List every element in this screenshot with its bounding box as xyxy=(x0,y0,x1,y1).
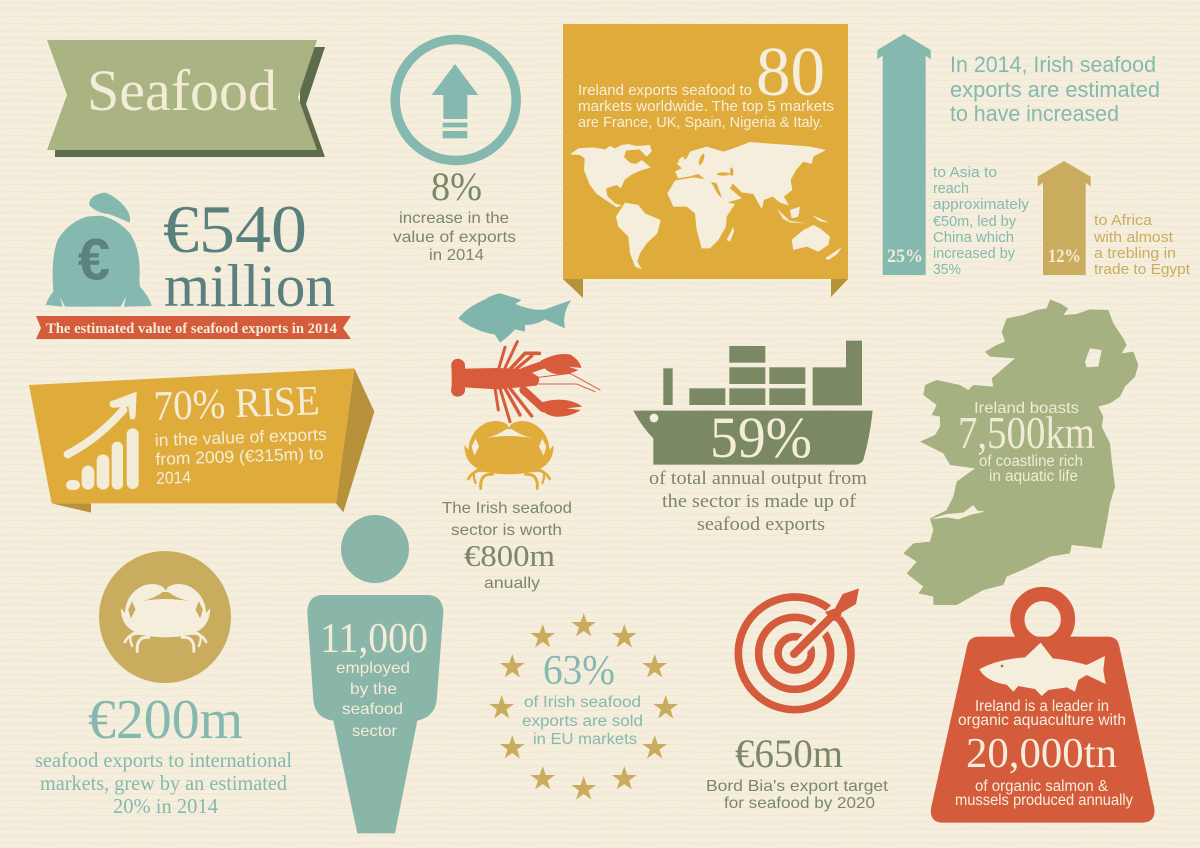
stat: 8% increase xyxy=(393,164,516,264)
icon: lobster xyxy=(451,342,600,422)
icon: rising teal arrow xyxy=(877,34,931,275)
headline: 540 million xyxy=(163,191,335,319)
text: total annual output: of total annual output from xyxy=(649,468,867,489)
Ireland text: in aquatic life xyxy=(989,468,1078,485)
panel: export markets xyxy=(563,24,848,298)
icon: target with dart xyxy=(738,588,859,710)
ribbon text xyxy=(153,378,328,488)
text: total annual output xyxy=(649,468,867,535)
title banner xyxy=(47,40,325,157)
icon: rising gold arrow xyxy=(1038,161,1091,275)
icon: money bag: € xyxy=(78,227,110,292)
Ireland text: Ireland boasts xyxy=(974,400,1079,417)
text: Asia: to Asia to xyxy=(933,165,997,181)
icon: rising bar chart with arrow xyxy=(66,392,139,490)
figure: person xyxy=(307,515,443,833)
stat: 200m: €200m xyxy=(88,689,243,751)
weight text: mussels produced annually xyxy=(955,792,1133,809)
text: Asia: 35% xyxy=(933,262,961,278)
person text: by the xyxy=(350,681,397,698)
arrow percentages: 12% xyxy=(1048,246,1081,267)
markets text: Ireland exports seafood to xyxy=(578,83,752,99)
person text xyxy=(320,616,428,740)
text: export target: €650m xyxy=(735,731,843,776)
text: Africa: trade to Egypt xyxy=(1094,262,1190,278)
stat: 63%: exports are sold xyxy=(522,713,643,730)
text: sector worth: The Irish seafood xyxy=(442,500,572,517)
stat: 8% increase: value of exports xyxy=(393,229,516,246)
weight text xyxy=(955,698,1133,809)
stat: 63% xyxy=(522,648,643,748)
person text: employed xyxy=(336,660,410,677)
headline: 540 million: €540 xyxy=(163,191,307,267)
icon: ring of EU stars xyxy=(489,613,678,800)
text: Asia xyxy=(933,165,1030,278)
text: sector worth xyxy=(442,500,572,592)
ribbon text: 70% RISE xyxy=(153,378,320,430)
stat: 8% increase: in 2014 xyxy=(429,247,484,264)
text: Africa: to Africa xyxy=(1094,213,1153,229)
text: Africa: with almost xyxy=(1093,230,1173,246)
panel: 70% rise ribbon xyxy=(29,368,374,513)
weight text: 20,000tn xyxy=(966,731,1117,777)
stat: 200m xyxy=(35,689,292,818)
ribbon text: 2014 xyxy=(156,468,191,488)
stat: 63%: in EU markets xyxy=(533,731,637,748)
text: Asia: increased by xyxy=(933,246,1016,262)
icon: circled up arrow xyxy=(395,40,516,160)
text: export target: for seafood by 2020 xyxy=(724,795,875,812)
text: Asia: approximately xyxy=(933,197,1030,213)
icon: container ship xyxy=(633,341,873,465)
markets text: 80 xyxy=(756,34,825,111)
stat: 63%: 63% xyxy=(543,648,615,694)
text: Asia: €50m, led by xyxy=(933,214,1017,230)
markets text xyxy=(578,34,834,131)
text: total annual output: seafood exports xyxy=(697,514,825,535)
text: sector worth: sector is worth xyxy=(451,522,562,539)
text: total annual output: the sector is made up of xyxy=(662,491,857,512)
person text: sector xyxy=(352,723,398,740)
ribbon text: from 2009 (€315m) to xyxy=(155,444,324,469)
Ireland text: of coastline rich xyxy=(979,453,1083,470)
arrow percentages: 25% xyxy=(887,246,923,267)
Ireland text xyxy=(958,400,1095,485)
stat: 200m: seafood exports to international xyxy=(35,748,292,772)
panel: weight xyxy=(931,594,1155,823)
icon: fish xyxy=(458,293,571,343)
heading: exports increased: In 2014, Irish seafood xyxy=(950,52,1156,77)
person text: 11,000 xyxy=(320,616,428,662)
stat: 200m: markets, grew by an estimated xyxy=(40,771,287,795)
text: export target xyxy=(706,731,889,812)
stat: 200m: 20% in 2014 xyxy=(113,794,218,818)
heading: exports increased: exports are estimated xyxy=(950,77,1160,102)
stat: 59%: 59% xyxy=(710,405,812,470)
text: Asia: China which xyxy=(933,230,1014,246)
text: sector worth: anually xyxy=(484,575,540,592)
icon: money bag xyxy=(46,193,152,307)
Ireland text: 7,500km xyxy=(958,407,1095,458)
icon: crab in circle xyxy=(99,551,231,683)
markets text: are France, UK, Spain, Nigeria & Italy. xyxy=(578,115,823,131)
person text: seafood xyxy=(342,701,403,718)
weight text: Ireland is a leader in xyxy=(975,698,1109,715)
heading: exports increased: to have increased xyxy=(950,101,1119,126)
text: export target: Bord Bia's export target xyxy=(706,778,889,795)
weight text: organic aquaculture with xyxy=(958,712,1126,729)
red ribbon caption: The estimated value of seafood exports in 2014 xyxy=(46,321,337,337)
markets text: markets worldwide. The top 5 markets xyxy=(578,99,834,115)
text: Africa xyxy=(1093,213,1190,278)
icon: crab xyxy=(464,421,554,488)
stat: 8% increase: increase in the xyxy=(399,210,509,227)
text: Asia: reach xyxy=(933,181,969,197)
stat: 63%: of Irish seafood xyxy=(524,694,641,711)
headline: 540 million: million xyxy=(164,253,335,319)
text: sector worth: €800m xyxy=(464,538,555,573)
world map xyxy=(570,142,842,269)
arrow percentages xyxy=(887,246,1081,267)
heading: exports increased xyxy=(950,52,1160,126)
weight text: of organic salmon & xyxy=(975,778,1109,795)
ribbon text: in the value of exports xyxy=(154,425,327,450)
title: Seafood xyxy=(87,58,277,123)
red ribbon caption xyxy=(36,316,351,339)
icon: salmon xyxy=(979,643,1106,696)
text: Africa: a trebling in xyxy=(1094,246,1176,262)
stat: 8% increase: 8% xyxy=(431,164,482,209)
map: Ireland xyxy=(903,299,1138,605)
